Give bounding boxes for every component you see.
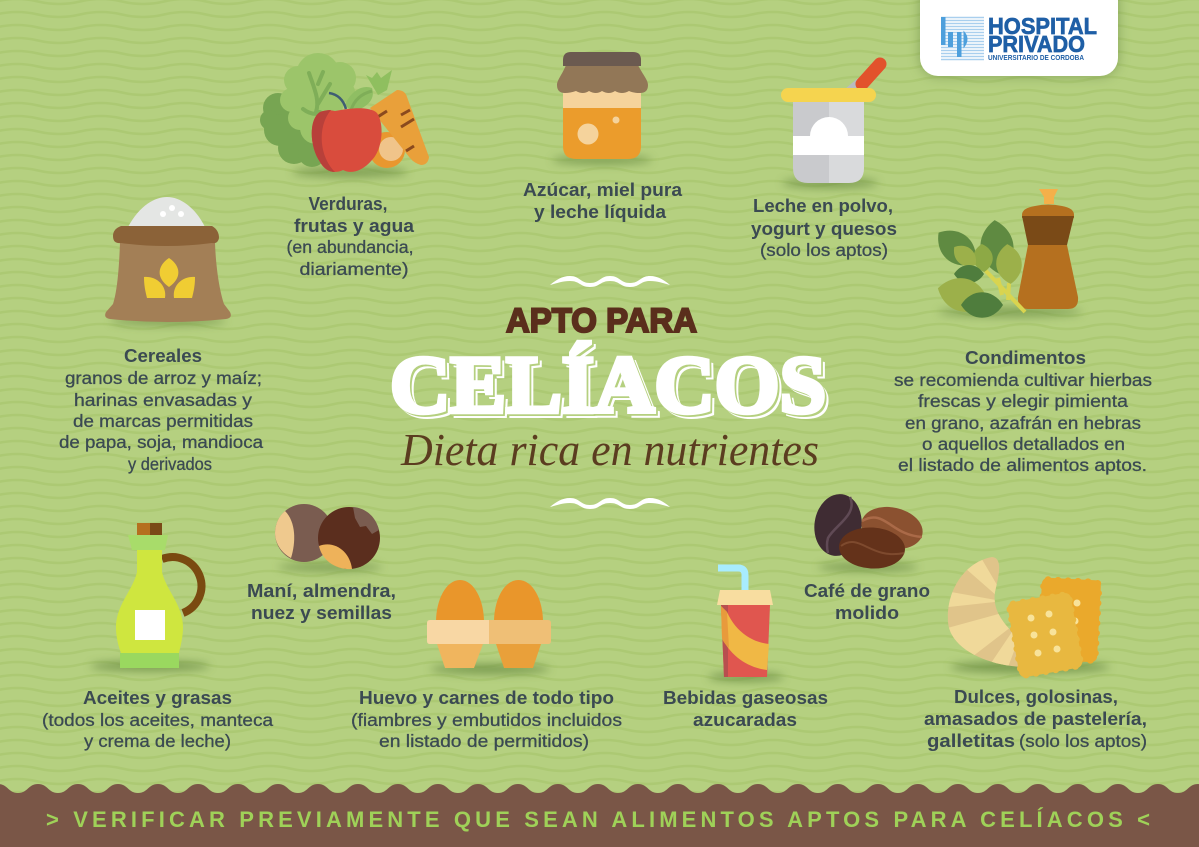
text: huevo [351,688,622,751]
text: dulces: amasados de pastelería, [924,709,1147,729]
icon: sack of grain [105,197,231,326]
text: dulces: galletitas [927,731,1015,751]
panel: maní [247,504,396,623]
panel: dulces [924,550,1147,751]
text: cereales: de papa, soja, mandioca [59,432,263,452]
panel: huevo [351,580,622,751]
heading: celíacos: CELÍACOS [392,341,828,432]
panel: leche [751,64,897,260]
icon: herbs and pepper mill [929,189,1082,318]
text: condimentos: frescas y elegir pimienta [918,391,1128,411]
text: condimentos: el listado de alimentos aptos. [898,455,1147,475]
text: verduras: diariamente) [300,259,408,279]
text: azúcar: y leche líquida [534,202,667,222]
text: leche [751,196,897,260]
text: huevo: Huevo y carnes de todo tipo [359,688,614,708]
text: aceites: Aceites y grasas [83,688,232,708]
text: cereales [59,346,263,474]
panel: cereales [59,197,263,474]
text: condimentos: en grano, azafrán en hebras [905,413,1141,433]
text: verduras: frutas y agua [294,216,415,236]
heading: celíacos: CELÍACOS [390,339,826,430]
icon: oil bottle [90,523,210,671]
text: dulces [924,687,1147,751]
icon: coffee beans [810,491,927,572]
text: aceites: y crema de leche) [84,731,231,751]
icon: croissant and biscuits [940,550,1110,678]
text: maní: nuez y semillas [251,603,392,623]
footer band [0,784,1199,847]
text: verduras [286,194,415,279]
text: bebidas [663,688,828,730]
text: leche: (solo los aptos) [760,240,888,260]
title block [390,276,830,509]
text: condimentos [894,348,1152,475]
text: cereales: granos de arroz y maíz; [65,368,262,388]
panel: azúcar [523,52,683,222]
subtitle: Dieta rica en nutrientes [400,424,819,475]
text: leche: yogurt y quesos [751,219,897,239]
icon: nuts [275,504,382,572]
text: azúcar [523,180,683,222]
text: condimentos: o aquellos detallados en [922,434,1125,454]
text: leche: Leche en polvo, [753,196,893,216]
text: cereales: y derivados [128,454,212,474]
divider: bottom wave [550,498,670,509]
text: bebidas: Bebidas gaseosas [663,688,828,708]
panel: condimentos [894,189,1152,475]
heading: celíacos: CELÍACOS [394,343,830,434]
text: aceites: (todos los aceites, manteca [42,710,273,730]
text: verduras: (en abundancia, [286,237,414,257]
text: cereales: harinas envasadas y [74,390,252,410]
heading: apto para: APTO PARA [506,302,697,340]
text: maní: Maní, almendra, [247,581,396,601]
divider: top wave [550,276,670,287]
text: café: Café de grano [804,581,930,601]
text: café: molido [835,603,899,623]
panel: aceites [42,523,273,751]
footer text: > VERIFICAR PREVIAMENTE QUE SEAN ALIMENTOS APTOS PARA CELÍACOS < [46,807,1150,832]
panel: verduras [260,53,429,279]
text: cereales: Cereales [124,346,202,366]
text: condimentos: Condimentos [965,348,1086,368]
text: verduras: Verduras, [308,194,388,214]
text: azúcar: Azúcar, miel pura [523,180,683,200]
icon: soda cup [708,568,784,682]
icon: jam jar [552,52,652,164]
text: huevo: (fiambres y embutidos incluidos [351,710,622,730]
icon: eggs in carton [427,580,551,674]
text: aceites [42,688,273,751]
panel: bebidas [663,568,828,730]
panel: café [804,491,930,623]
text: dulces: (solo los aptos) [1019,731,1147,751]
icon: lettuce, apple and carrot [260,53,429,177]
text: café [804,581,930,623]
logo: Hospital Privado [920,0,1118,76]
text: bebidas: azucaradas [693,710,797,730]
logo: Hospital Privado: HOSPITAL [988,13,1097,39]
text: cereales: de marcas permitidas [73,411,253,431]
icon: yogurt cup [781,64,880,188]
text: huevo: en listado de permitidos) [379,731,589,751]
logo: Hospital Privado: UNIVERSITARIO DE CORDOBA [988,53,1084,62]
text: maní [247,581,396,623]
text: condimentos: se recomienda cultivar hierbas [894,370,1152,390]
logo: Hospital Privado: PRIVADO [988,31,1085,57]
text: dulces: Dulces, golosinas, [954,687,1118,707]
